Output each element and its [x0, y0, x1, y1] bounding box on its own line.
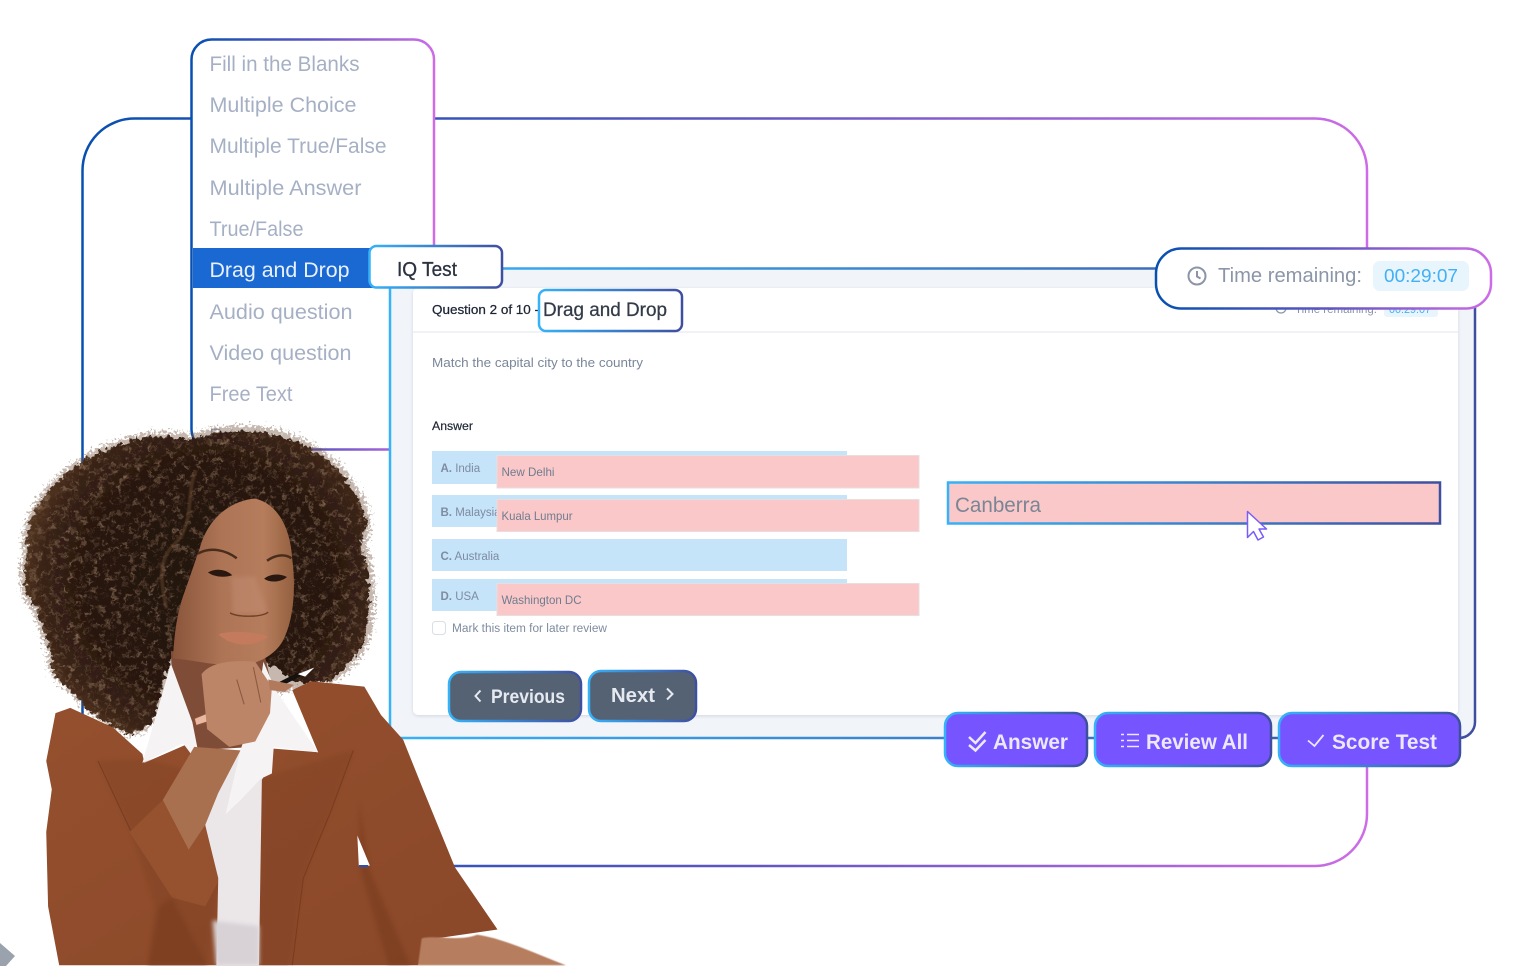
- hidden timer under callout: [1276, 303, 1438, 317]
- button: Next: Next: [611, 685, 655, 707]
- active menu band: [193, 248, 373, 288]
- callout: Drag and Drop title: Drag and Drop: [543, 300, 667, 321]
- necklace: [194, 713, 207, 726]
- question prompt: Match the capital city to the country: [432, 355, 644, 370]
- hair: [22, 427, 373, 733]
- button: Previous: [449, 672, 581, 721]
- button: Review All: Review All: [1146, 731, 1248, 754]
- callout: IQ Test tab: [370, 246, 502, 288]
- button: Answer: Answer: [993, 731, 1068, 754]
- gap between torso and sleeve: [357, 836, 370, 866]
- answer row C: [432, 539, 847, 571]
- hidden timer under callout: 00:29:07: [1389, 304, 1431, 316]
- callout: dragged answer Canberra: [948, 482, 1440, 524]
- menu items: Multiple True/False: [210, 134, 386, 158]
- question counter: Question 2 of 10 -: [432, 302, 539, 317]
- review checkbox: Mark this item for later review: [452, 623, 608, 635]
- answer row A: [432, 451, 919, 488]
- question card: [413, 288, 1458, 715]
- button: Previous: Previous: [491, 687, 565, 708]
- person: woman thinking: [22, 427, 566, 965]
- shirt: [192, 747, 274, 965]
- menu items: Multiple Choice: [210, 93, 356, 117]
- laptop corner: [0, 943, 15, 966]
- menu items: Video question: [210, 341, 352, 365]
- icon: check: [1308, 735, 1324, 746]
- button: Score Test: Score Test: [1332, 731, 1437, 754]
- outer gradient frame: [82, 118, 1367, 866]
- menu items: Multiple Answer: [210, 176, 362, 200]
- icon: cursor: [1248, 512, 1266, 540]
- callout: IQ Test tab: IQ Test: [397, 259, 457, 281]
- answer row B: Kuala Lumpur: [502, 509, 572, 523]
- icon: list: [1121, 734, 1139, 746]
- button: Review All: [1095, 713, 1271, 766]
- callout: time remaining: [1156, 248, 1491, 308]
- answer label: Answer: [432, 421, 473, 433]
- menu items: Fill in the Blanks: [210, 52, 360, 76]
- answer row D: D. USA: [440, 591, 479, 603]
- collar: [142, 662, 318, 814]
- timer value: 00:29:07: [1384, 266, 1458, 286]
- menu items: Audio question: [210, 300, 352, 324]
- answer row B: B. Malaysia: [440, 507, 501, 519]
- neck and face: [171, 499, 294, 750]
- menu items: True/False: [210, 217, 304, 241]
- answer row B: [432, 495, 919, 532]
- menu items: Drag and Drop: [210, 258, 350, 282]
- answer row C: C. Australia: [440, 551, 500, 563]
- answer row A: New Delhi: [502, 465, 554, 479]
- jacket: [46, 681, 498, 965]
- timer value: [1373, 261, 1469, 291]
- icon: clock: [1188, 268, 1206, 284]
- callout: dragged answer Canberra: Canberra: [955, 493, 1041, 517]
- answer row A: A. India: [440, 463, 481, 475]
- hidden timer under callout: Time remaining:: [1295, 304, 1377, 316]
- callout: Drag and Drop title: [539, 290, 682, 331]
- menu items: Essay: [210, 424, 258, 448]
- button: Score Test: [1279, 713, 1460, 766]
- panel: quiz screen: [390, 268, 1475, 738]
- icon: double check: [969, 732, 986, 750]
- right hand: [418, 935, 566, 965]
- button: Next: [589, 671, 696, 721]
- answer row D: Washington DC: [502, 593, 582, 607]
- panel: question type menu: [192, 40, 434, 450]
- arm and hand: [163, 661, 272, 850]
- frame segment visible through gap: [359, 865, 368, 867]
- callout: time remaining: Time remaining:: [1218, 265, 1362, 287]
- menu items: Free Text: [210, 382, 293, 406]
- answer row D: [432, 579, 919, 616]
- button: Answer: [945, 713, 1087, 766]
- pen: [268, 667, 314, 692]
- menu items: [210, 52, 386, 448]
